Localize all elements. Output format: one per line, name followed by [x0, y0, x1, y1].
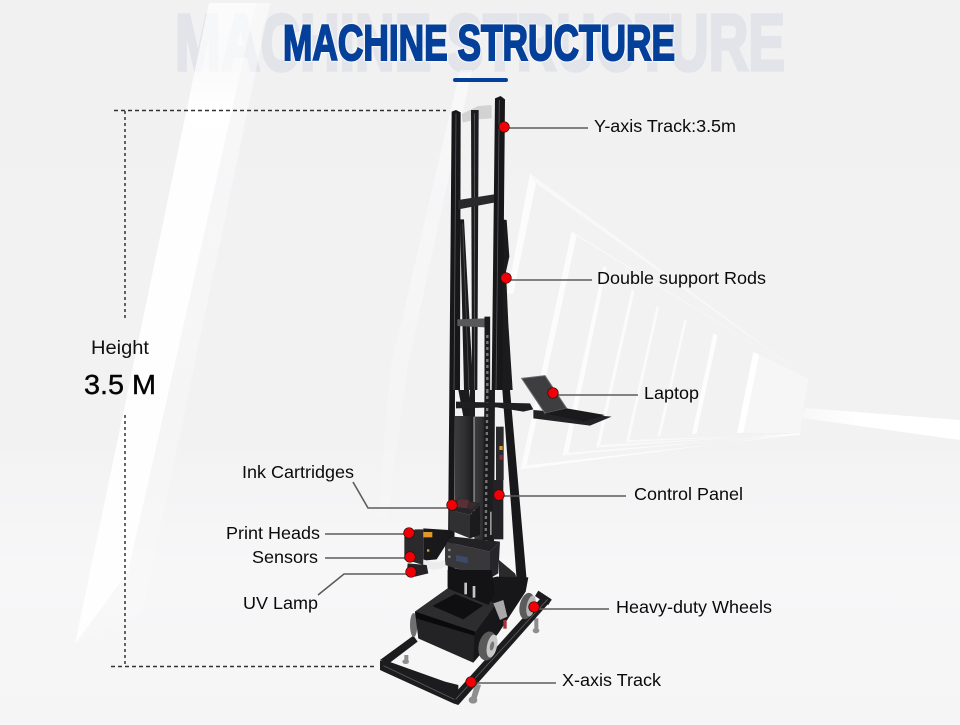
top bracket: [462, 105, 492, 123]
callout: Heavy-duty Wheels: [529, 597, 772, 617]
callout: Sensors: Sensors: [252, 547, 318, 567]
callout: Print Heads: [226, 523, 414, 543]
clamp: [493, 600, 507, 620]
feet: [402, 618, 539, 704]
cylinders: [455, 416, 474, 513]
laptop screen: [522, 376, 567, 413]
callout: Ink Cartridges: [242, 462, 457, 510]
right column: [487, 390, 495, 547]
support rods lower: [458, 390, 472, 417]
machine: [380, 96, 612, 705]
laptop keyboard: [545, 408, 605, 422]
lower motor section: [499, 560, 518, 582]
callout: Y-axis Track: [499, 116, 736, 136]
status strip: [496, 427, 504, 480]
callout: Ink Cartridges: Ink Cartridges: [242, 462, 354, 482]
laptop arm: [456, 402, 533, 412]
middle rods: [471, 110, 479, 390]
callout: UV Lamp: UV Lamp: [243, 593, 318, 613]
middle machine: [404, 390, 527, 590]
left support rods: [460, 219, 473, 390]
callout: UV Lamp: [243, 567, 416, 613]
front wheel: [476, 630, 500, 662]
callout: Double support Rods: Double support Rods: [597, 268, 766, 288]
title underline: [453, 78, 508, 82]
callout: X-axis Track: X-axis Track: [562, 670, 661, 690]
column feet and spindles: [448, 570, 495, 605]
side panel: [493, 480, 503, 539]
cable chain: [479, 317, 496, 390]
callout: X-axis Track: [466, 670, 661, 690]
callout: Laptop: Laptop: [644, 383, 699, 403]
callout: Print Heads: Print Heads: [226, 523, 320, 543]
corridor frames: [507, 173, 808, 469]
machine base: [380, 570, 552, 705]
cable chain lower: [486, 390, 487, 540]
right column: [492, 96, 505, 390]
lower gray bar: [457, 318, 485, 327]
controller box: [445, 542, 490, 578]
print head assembly: [423, 528, 449, 561]
callout: Y-axis Track: Y-axis Track:3.5m: [594, 116, 736, 136]
left column: [448, 390, 455, 587]
ink cartridge box: [449, 510, 470, 538]
height label: Height: [91, 337, 150, 359]
right support rod: [502, 219, 513, 390]
callout: Double support Rods: [501, 268, 766, 288]
height value: 3.5 M: [84, 369, 156, 400]
callout: Control Panel: Control Panel: [634, 484, 743, 504]
left column: [449, 110, 461, 390]
UV lamp: [407, 563, 428, 577]
laptop and arm: [456, 376, 612, 426]
callout: Laptop: [548, 383, 699, 403]
title: MACHINE STRUCTURE: [283, 15, 675, 71]
callout: Heavy-duty Wheels: Heavy-duty Wheels: [616, 597, 772, 617]
laptop tray: [533, 410, 612, 426]
upper columns and rods: [449, 96, 513, 390]
callout: Control Panel: [494, 484, 743, 504]
X-axis track: [380, 591, 552, 705]
callout: Sensors: [252, 547, 415, 567]
rear wheels: [410, 613, 417, 637]
cross bar: [458, 194, 494, 209]
right support rod lower: [502, 390, 527, 580]
base body: [415, 577, 528, 663]
